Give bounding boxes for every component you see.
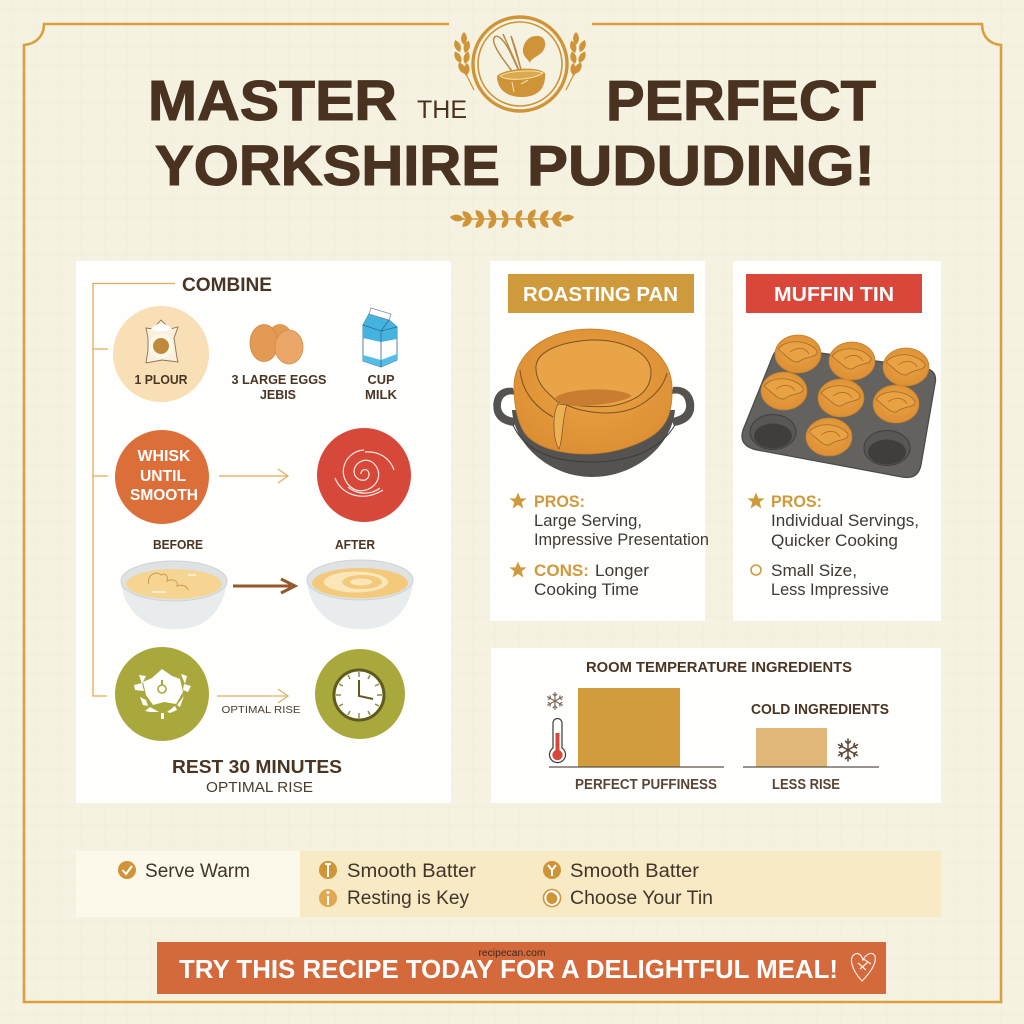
step connector lines (93, 284, 175, 696)
heading band: roasting pan (508, 274, 694, 313)
call to action banner (157, 942, 886, 994)
cons text: Less Impressive (771, 581, 889, 599)
star (747, 492, 765, 508)
ingredient: eggs (232, 324, 327, 402)
arrow: whisk to swirl (219, 469, 288, 483)
ingredient: eggs: JEBIS (260, 387, 296, 402)
step: whisk until smooth: WHISK (138, 448, 191, 465)
tip: choose your tin: Choose Your Tin (570, 888, 713, 909)
step: whisk until smooth: SMOOTH (130, 487, 198, 504)
pros text: Large Serving, (534, 512, 642, 530)
pros text (771, 512, 919, 550)
heading band: muffin tin (746, 274, 922, 313)
pros text: Individual Servings, (771, 512, 919, 530)
ingredient: flour (113, 306, 209, 402)
bar: cold (756, 728, 827, 767)
title (148, 69, 876, 198)
chart baselines (549, 766, 879, 768)
panel: method steps (76, 261, 451, 803)
icon: resting dough (115, 647, 209, 741)
label: perfect puffiness: PERFECT PUFFINESS (575, 777, 717, 793)
label: before: BEFORE (153, 538, 203, 552)
tip: smooth batter: Smooth Batter (347, 861, 477, 882)
pros label: PROS: (534, 492, 585, 511)
arrow: rest to optimal rise (217, 689, 300, 716)
step: whisk until smooth: UNTIL (140, 468, 186, 485)
icon: small snowflake (547, 692, 563, 710)
label: after: AFTER (335, 538, 375, 552)
title: PERFECT (606, 69, 876, 133)
bowl: lumpy batter (121, 561, 227, 629)
step: whisk until smooth (115, 430, 209, 524)
cons text: Small Size, (771, 562, 857, 580)
tips strip (76, 851, 941, 917)
bar: room temperature (578, 688, 680, 767)
pros text: Quicker Cooking (771, 532, 898, 550)
illustration: muffin tin (742, 335, 936, 478)
tip: smooth batter: Smooth Batter (570, 861, 700, 882)
heading band: muffin tin: MUFFIN TIN (774, 284, 894, 306)
caption: rest 30 minutes: REST 30 MINUTES (172, 756, 342, 777)
chart heading: ROOM TEMPERATURE INGREDIENTS (586, 660, 852, 676)
panel: muffin tin (733, 261, 941, 621)
icon: snowflake (838, 738, 858, 762)
star (509, 492, 527, 508)
panel: temperature chart (491, 648, 941, 803)
title: MASTER (148, 69, 397, 133)
ingredient: milk carton: MILK (365, 387, 398, 402)
icon: batter swirl (317, 428, 411, 522)
call to action banner: TRY THIS RECIPE TODAY FOR A DELIGHTFUL MEAL! (179, 954, 838, 984)
pros label: PROS: (771, 492, 822, 511)
emblem: whisk, spoon and bowl (452, 17, 588, 111)
pros text: Impressive Presentation (534, 531, 709, 549)
arrow: before to after (233, 579, 295, 593)
label: less rise: LESS RISE (772, 777, 840, 793)
title: PUDUDING! (527, 134, 875, 198)
ingredient: milk carton (363, 308, 398, 402)
cons: Cooking Time (534, 581, 639, 599)
pros text (534, 512, 709, 549)
icon: clock (315, 649, 405, 739)
ingredient: eggs: 3 LARGE EGGS (232, 372, 327, 387)
label: cold ingredients: COLD INGREDIENTS (751, 702, 889, 718)
star (509, 562, 527, 578)
caption: optimal rise: OPTIMAL RISE (206, 779, 313, 796)
icon: thermometer (550, 718, 566, 763)
title: THE (417, 96, 467, 124)
cons: CONS: (534, 561, 589, 580)
title: YORKSHIRE (155, 134, 500, 198)
tip: serve warm: Serve Warm (145, 861, 250, 882)
cons (534, 561, 650, 599)
heading: combine: COMBINE (182, 275, 272, 296)
arrow: rest to optimal rise: OPTIMAL RISE (222, 704, 300, 716)
icon: heart (851, 953, 875, 981)
wheat ornament (449, 208, 575, 230)
heading band: roasting pan: ROASTING PAN (523, 284, 678, 306)
cons text (771, 562, 889, 599)
illustration: pudding in pan (493, 329, 694, 477)
bowl: smooth batter (307, 560, 413, 629)
icon: cons ring (751, 565, 761, 575)
panel: roasting pan (490, 261, 709, 621)
ingredient: milk carton: CUP (368, 372, 395, 387)
watermark: recipecan.com (478, 948, 546, 959)
cons: Longer (595, 562, 650, 580)
ingredient: flour: 1 PLOUR (134, 372, 188, 387)
tip: resting is key: Resting is Key (347, 888, 469, 909)
